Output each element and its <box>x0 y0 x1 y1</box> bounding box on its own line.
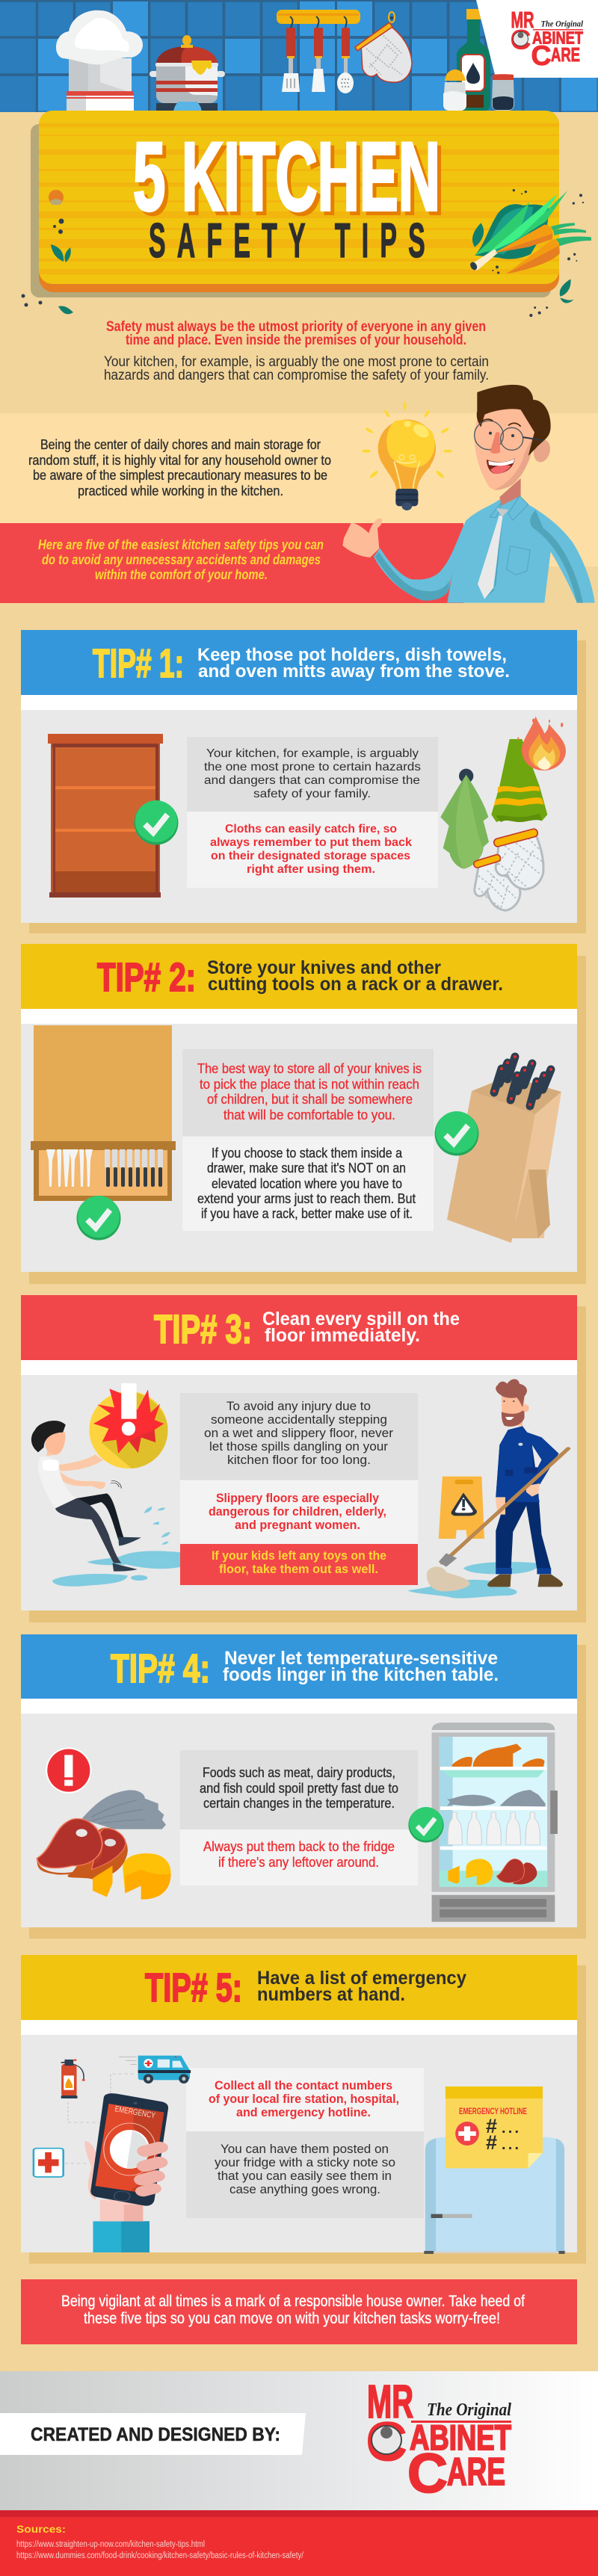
text: chores paragraph: Being the center of daily chores and main storage for <box>40 436 321 452</box>
icon: check mark <box>408 1807 444 1843</box>
icon: check mark <box>135 800 178 844</box>
title: 5 Kitchen <box>133 122 444 235</box>
text box: tip 5 grey <box>186 2131 424 2218</box>
logo: Mr Cabinet Care (header): The Original <box>541 18 584 28</box>
heading: tip 5 title: numbers at hand. <box>257 1984 405 2005</box>
icon: check mark <box>76 1196 121 1241</box>
panel: credits band <box>0 2371 598 2510</box>
text: intro red: Safety must always be the utmost priority of everyone in any given <box>106 319 486 335</box>
text box: tip 1 light <box>187 812 438 888</box>
text box: tip 1 light: Cloths can easily catch fire, so <box>225 823 397 835</box>
text box: tip 4 grey <box>180 1750 418 1829</box>
logo: Mr Cabinet Care (footer) <box>366 2376 511 2504</box>
text: intro red <box>106 319 486 348</box>
text box: tip 2 grey: of children, but it shall be somewhere <box>207 1091 413 1107</box>
text: created and designed by: CREATED AND DESIGNED BY: <box>31 2424 280 2445</box>
heading: tip 4 title <box>223 1648 499 1685</box>
text box: tip 3 grey: on a wet and slippery floor, never <box>204 1426 393 1440</box>
callout: closing message: Being vigilant at all times is a mark of a responsible house owner. Take heed of <box>61 2293 525 2310</box>
panel: tip 2 <box>21 944 586 1284</box>
heading: tip 5 title: Have a list of emergency <box>257 1968 466 1989</box>
text: sticky note hotline: # <box>486 2115 497 2137</box>
text box: tip 3 grey: kitchen floor for too long. <box>227 1453 371 1467</box>
heading: tip 5 title <box>257 1968 466 2005</box>
icon: vegetables <box>469 189 591 317</box>
heading: tip 4 header bar <box>21 1634 577 1699</box>
panel: sources footer <box>0 2510 598 2576</box>
heading: tip 1 number: TIP# 1: <box>93 641 184 686</box>
text: five tips italic: Here are five of the easiest kitchen safety tips you can <box>38 537 324 552</box>
text box: tip 5 grey: You can have them posted on <box>221 2142 389 2156</box>
heading: tip 1 title <box>197 645 510 682</box>
logo: Mr Cabinet Care (header): C <box>511 24 531 55</box>
panel: cutting board <box>31 111 559 297</box>
text box: tip 3 grey: To avoid any injury due to <box>226 1399 371 1413</box>
text: sticky note hotline: ... <box>502 2137 519 2153</box>
icon: cooking pot <box>150 35 225 111</box>
text: phone screen label: EMERGENCY <box>114 2104 156 2121</box>
text: sticky note hotline: ... <box>502 2120 519 2137</box>
heading: tip 1 header bar <box>21 630 577 695</box>
text box: tip 2 grey <box>182 1049 434 1136</box>
text box: tip 2 light: if you have a rack, better make use of it. <box>201 1205 413 1221</box>
icon: hanging utensils on rack <box>277 10 360 93</box>
text: chores paragraph: be aware of the simplest precautionary measures to be <box>33 467 327 483</box>
text box: tip 4 grey: and fish could spoil pretty fast due to <box>200 1780 398 1796</box>
text box: tip 4 grey: certain changes in the temperature. <box>203 1795 395 1811</box>
text box: tip 2 light: drawer, make sure that it's NOT on an <box>207 1160 406 1176</box>
heading: tip 1 title: and oven mitts away from the stove. <box>198 661 510 682</box>
text: sticky note hotline: EMERGENCY HOTLINE <box>459 2107 527 2116</box>
icon: oven mitt <box>355 12 412 82</box>
text: chores paragraph: random stuff, it is highly vital for any household owner to <box>28 452 331 468</box>
icon: salt shaker <box>443 70 466 111</box>
text: intro dark: Your kitchen, for example, is arguably the one most prone to certain <box>104 354 489 370</box>
icon: janitor with mop and wet floor sign <box>407 1379 568 1599</box>
heading: tip 2 title <box>207 957 503 995</box>
text box: tip 3 red: If your kids left any toys on the <box>212 1548 386 1563</box>
icon: smiling man with thumbs up <box>342 385 595 603</box>
text box: tip 3 grey: let those spills dangling on your <box>209 1439 388 1454</box>
logo: Mr Cabinet Care (footer): ABINET <box>410 2418 511 2457</box>
panel: logo background top right <box>476 0 598 78</box>
text box: tip 1 grey: the one most prone to certain hazards <box>204 761 421 773</box>
panel: tip 1 <box>21 630 586 933</box>
text box: tip 1 grey: safety of your family. <box>253 788 371 800</box>
text: sources heading: Sources: <box>16 2523 66 2535</box>
icon: stocked fridge <box>432 1723 558 1922</box>
text box: tip 5 light: and emergency hotline. <box>236 2105 371 2119</box>
text box: tip 3 red: floor, take them out as well. <box>219 1562 378 1576</box>
panel: red band <box>0 523 463 603</box>
icon: check mark <box>435 1111 478 1155</box>
icon: oil bottle <box>457 9 490 111</box>
logo: Mr Cabinet Care (header): C <box>531 40 552 71</box>
heading: tip 5 header bar <box>21 1955 577 2020</box>
text: intro dark <box>104 354 489 383</box>
text box: tip 5 light: Collect all the contact numbers <box>215 2078 392 2092</box>
text box: tip 2 grey: to pick the place that is not within reach <box>200 1076 419 1092</box>
text box: tip 2 light: extend your arms just to reach them. But <box>197 1190 416 1206</box>
heading: tip 2 title: cutting tools on a rack or a drawer. <box>208 974 503 995</box>
text box: tip 5 grey: your fridge with a sticky note so <box>215 2155 395 2169</box>
text: source links: https://www.straighten-up-now.com/kitchen-safety-tips.html <box>16 2540 205 2549</box>
text: intro red: time and place. Even inside the premises of your household. <box>126 333 466 348</box>
heading: tip 4 title: foods linger in the kitchen table. <box>223 1664 499 1685</box>
panel: light band <box>0 413 598 566</box>
text box: tip 2 light <box>182 1137 434 1231</box>
icon: light bulb <box>362 402 452 510</box>
callout: closing message <box>21 2279 577 2344</box>
heading: tip 2 number: TIP# 2: <box>97 955 196 1000</box>
icon: slipping man with warning <box>31 1383 181 1587</box>
text: five tips italic: within the comfort of your home. <box>95 566 268 582</box>
text: sticky note hotline: # <box>486 2131 497 2154</box>
text box: tip 4 light: Always put them back to the fridge <box>203 1838 395 1854</box>
icon: pepper shaker <box>492 74 514 111</box>
text: intro dark: hazards and dangers that can compromise the safety of your family. <box>104 368 489 383</box>
text box: tip 3 light: dangerous for children, elderly, <box>209 1504 386 1519</box>
text: source links: https://www.dummies.com/food-drink/cooking/kitchen-safety/basic-rules-of-kitchen-safety/ <box>16 2551 304 2560</box>
logo: Mr Cabinet Care (footer): C <box>407 2442 448 2504</box>
heading: tip 3 title: Clean every spill on the <box>262 1309 460 1329</box>
icon: extinguisher, ambulance, phone in hand <box>34 2056 191 2252</box>
text: source links <box>16 2540 304 2560</box>
panel: tip 3 <box>21 1295 586 1622</box>
text box: tip 3 grey: someone accidentally stepping <box>211 1412 387 1427</box>
logo: Mr Cabinet Care (header) <box>511 7 584 71</box>
callout: closing message: these five tips so you can move on with your kitchen tasks worry-free! <box>84 2310 500 2327</box>
logo: Mr Cabinet Care (footer): The Original <box>427 2400 511 2420</box>
heading: tip 3 title <box>262 1309 460 1346</box>
text box: tip 4 light: if there's any leftover around. <box>218 1854 379 1870</box>
text box: tip 5 light <box>186 2068 424 2131</box>
panel: tip 5 <box>21 1955 586 2264</box>
text box: tip 2 light: elevated location where you have to <box>212 1176 402 1191</box>
text: chores paragraph <box>28 436 331 498</box>
icon: wooden cabinet <box>48 734 163 898</box>
text box: tip 1 grey <box>187 737 438 812</box>
text: five tips italic <box>38 537 324 582</box>
logo: Mr Cabinet Care (footer): MR <box>367 2376 413 2428</box>
text: five tips italic: do to avoid any unnecessary accidents and damages <box>42 552 321 567</box>
icon: warning, fish, steak and cheese <box>37 1747 171 1900</box>
icon: chef hat <box>56 10 143 111</box>
heading: tip 3 header bar <box>21 1295 577 1360</box>
text box: tip 2 grey: that will be comfortable to you. <box>224 1107 395 1122</box>
text box: tip 3 light: Slippery floors are especially <box>216 1491 380 1505</box>
logo: Mr Cabinet Care (header): ARE <box>551 43 580 66</box>
logo: Mr Cabinet Care (footer): ARE <box>447 2450 505 2494</box>
text box: tip 1 light: always remember to put them back <box>210 836 412 849</box>
panel: tip 4 <box>21 1634 586 1939</box>
text box: tip 4 light <box>180 1829 418 1885</box>
logo: Mr Cabinet Care (header): ABINET <box>532 28 583 48</box>
icon: leaves and specks left of board <box>21 218 73 314</box>
title: Safety Tips: SAFETY TIPS <box>149 213 425 268</box>
text: sticky note hotline <box>459 2107 527 2154</box>
panel: blue tile wall <box>0 0 598 112</box>
heading: tip 2 header bar <box>21 944 577 1009</box>
heading: tip 4 number: TIP# 4: <box>111 1646 210 1691</box>
text box: tip 3 light <box>180 1480 418 1544</box>
logo: Mr Cabinet Care (header): MR <box>511 7 534 33</box>
icon: fridge with sticky note <box>424 2087 566 2254</box>
text box: tip 3 light: and pregnant women. <box>235 1518 360 1532</box>
text: chores paragraph: practiced while working in the kitchen. <box>78 483 283 498</box>
heading: tip 5 number: TIP# 5: <box>145 1965 242 2010</box>
icon: towels, mitts and fire <box>440 716 566 910</box>
text box: tip 1 grey: and dangers that can compromise the <box>204 774 420 787</box>
text box: tip 5 light: of your local fire station, hospital, <box>209 2092 399 2106</box>
text box: tip 5 grey: case anything goes wrong. <box>229 2182 380 2196</box>
text box: tip 4 grey: Foods such as meat, dairy products, <box>203 1764 395 1780</box>
text box: tip 5 grey: that you can easily see them in <box>218 2169 392 2183</box>
heading: tip 3 number: TIP# 3: <box>154 1307 252 1352</box>
heading: tip 1 title: Keep those pot holders, dish towels, <box>197 645 507 665</box>
text box: tip 3 red <box>180 1544 418 1585</box>
logo: Mr Cabinet Care (footer): C <box>366 2412 407 2472</box>
text box: tip 2 grey: The best way to store all of your knives is <box>197 1060 422 1076</box>
icon: drawer with cutlery <box>31 1025 176 1201</box>
text box: tip 1 grey: Your kitchen, for example, is arguably <box>206 747 419 760</box>
text box: tip 1 light: on their designated storage spaces <box>211 850 410 862</box>
text box: tip 3 grey <box>180 1393 418 1480</box>
heading: tip 2 title: Store your knives and other <box>207 957 441 978</box>
text box: tip 2 light: If you choose to stack them inside a <box>212 1145 403 1161</box>
heading: tip 3 title: floor immediately. <box>265 1325 420 1346</box>
heading: tip 4 title: Never let temperature-sensitive <box>224 1648 498 1669</box>
text box: tip 1 light: right after using them. <box>247 863 375 876</box>
icon: knife block <box>447 1055 561 1243</box>
